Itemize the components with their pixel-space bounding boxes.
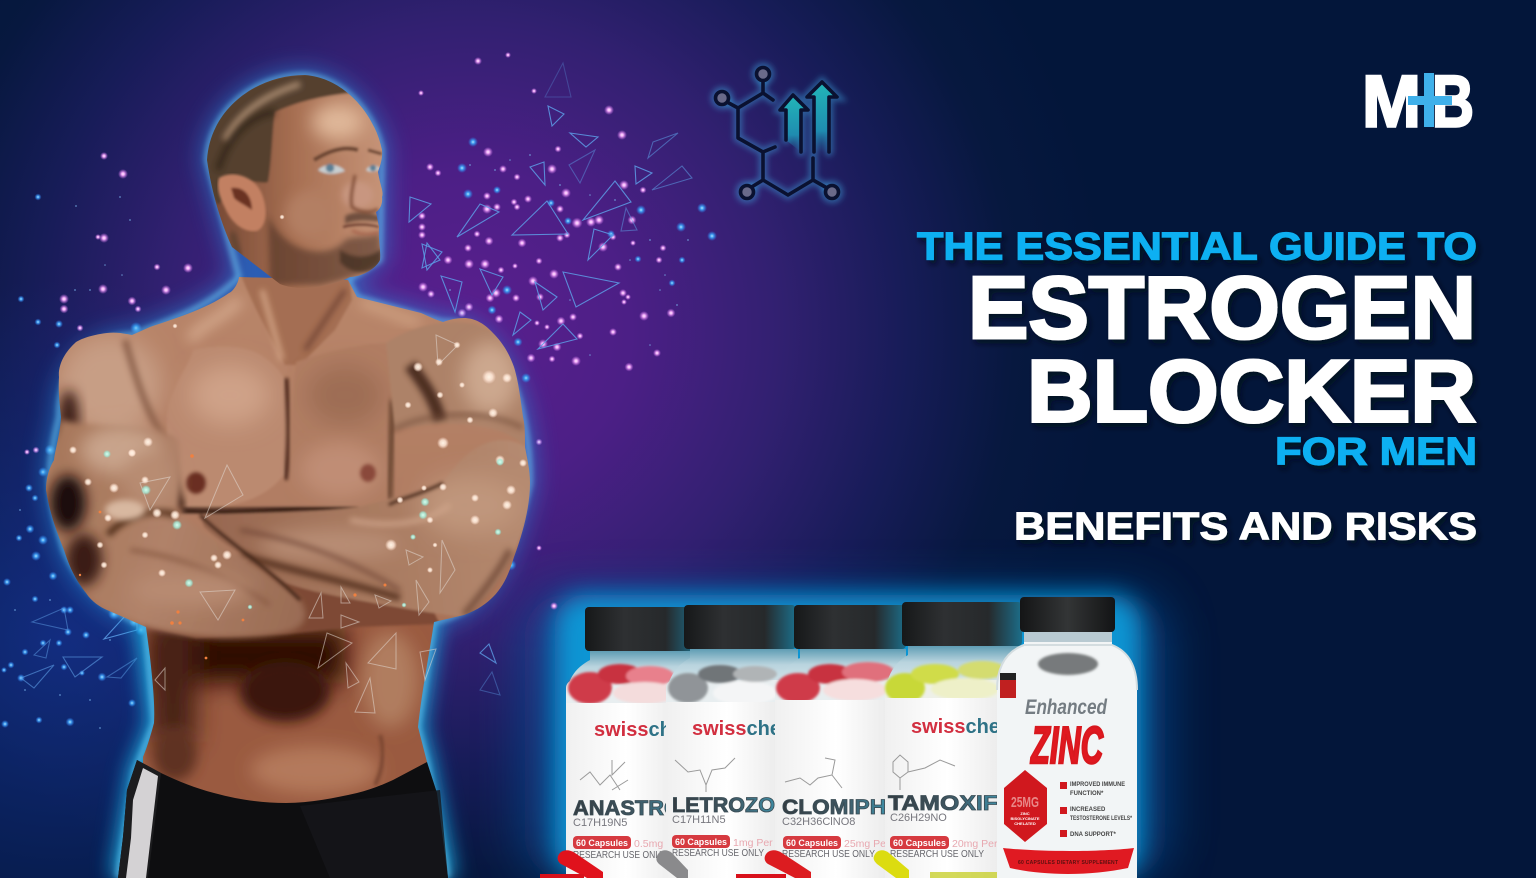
logo: M+B: M [1362,62,1421,142]
title block [917,226,1477,548]
pectorals [165,343,395,512]
bottle: anastrozole: 60 Capsules [576,838,628,848]
bottle: anastrozole: ANASTRO [573,797,681,820]
benefit bullets: IMPROVED IMMUNE [1070,782,1125,788]
bottle: letrozole: C17H11N5 [672,814,726,826]
hair [204,74,350,205]
bottle: letrozole: LETROZO [672,794,775,817]
stubble [268,215,382,285]
bottle: tamoxifen: C26H29NO [890,812,947,824]
bottle: clomiphene: RESEARCH USE ONLY [782,849,875,860]
bottle: anastrozole: swissche [594,719,683,741]
bottles group [540,597,1137,878]
bottle: clomiphene: C32H36ClNO8 [782,816,855,828]
particles: background field [1,52,717,729]
bottle: clomiphene [775,605,909,878]
upper forearm [200,440,532,617]
heading line: the essential guide to: THE ESSENTIAL GUIDE TO [917,226,1477,268]
bottle: anastrozole: 0.5mg Per [634,838,683,850]
left deltoid [58,335,165,446]
bottle: anastrozole [566,607,703,878]
bottle: letrozole: 1mg Per 1 [733,837,782,849]
bottle: clomiphene: CLOMIPH [782,796,886,819]
25mg badge: BISGLYCINATE [1010,816,1040,821]
shorts [118,760,448,878]
loose capsules [540,850,1000,878]
benefit bullets: FUNCTION* [1070,791,1104,797]
abdomen [142,624,434,795]
bottle: tamoxifen: 20mg Per [952,838,998,850]
25mg badge: CHELATED [1014,821,1036,826]
heading: estrogen: ESTROGEN [968,258,1476,357]
enhanced wordmark: Enhanced [1025,696,1108,719]
icon: molecule with rising arrows [715,67,839,199]
brows and eyes [314,148,358,160]
bottle: anastrozole: C17H19N5 [573,817,627,829]
bottle: tamoxifen: swissche [911,716,1000,738]
side sticker [1000,673,1016,698]
left upper arm and lower forearm [46,420,305,637]
zinc wordmark: ZINC [1030,717,1104,775]
man [40,70,540,878]
bottle: anastrozole: RESEARCH USE ONLY [573,850,665,861]
bottle: tamoxifen [885,602,1023,878]
bottle: enhanced zinc [997,597,1137,878]
bottle: clomiphene: 60 Capsules [786,838,838,848]
nose shadow [351,175,378,212]
particles: wireframe triangles [21,63,692,695]
heading: blocker: BLOCKER [1027,342,1476,440]
mouth [343,225,379,227]
bottle: tamoxifen: RESEARCH USE ONLY [890,849,984,860]
benefit bullets [1060,782,1133,838]
man glow outline [50,75,530,875]
benefit bullets: INCREASED [1070,807,1106,813]
particles: triangles over body [140,335,458,713]
glow behind bottles [525,595,1165,878]
benefit bullets: DNA SUPPORT* [1070,832,1116,838]
bottle: letrozole: RESEARCH USE ONLY [672,848,764,859]
bottle: clomiphene: 25mg Per [844,838,890,850]
bottle: letrozole: swissche [692,718,781,740]
logo: M+B [1362,62,1474,142]
25mg badge: ZINC [1020,811,1030,816]
lower forearm hand band [146,560,440,638]
head [207,75,382,288]
bottle: tamoxifen: TAMOXIF [888,792,998,815]
red band [1003,848,1134,874]
bottle: tamoxifen: 60 Capsules [893,838,946,848]
logo: M+B: B [1432,62,1474,142]
torso and arms [40,270,540,820]
ear [218,174,266,231]
25mg badge: 25MG [1011,794,1039,811]
neck shading [190,270,420,365]
subheading: benefits and risks: BENEFITS AND RISKS [1014,506,1477,548]
bottle: letrozole: 60 Capsules [675,837,727,847]
benefit bullets: TESTOSTERONE LEVELS* [1070,816,1133,822]
25mg badge [1004,770,1047,842]
red band: 60 CAPSULES DIETARY SUPPLEMENT [1018,860,1118,866]
bottle: letrozole [666,605,801,878]
right shoulder [388,324,524,434]
heading line: for men: FOR MEN [1275,430,1477,474]
particles: sparks over body [69,214,527,659]
